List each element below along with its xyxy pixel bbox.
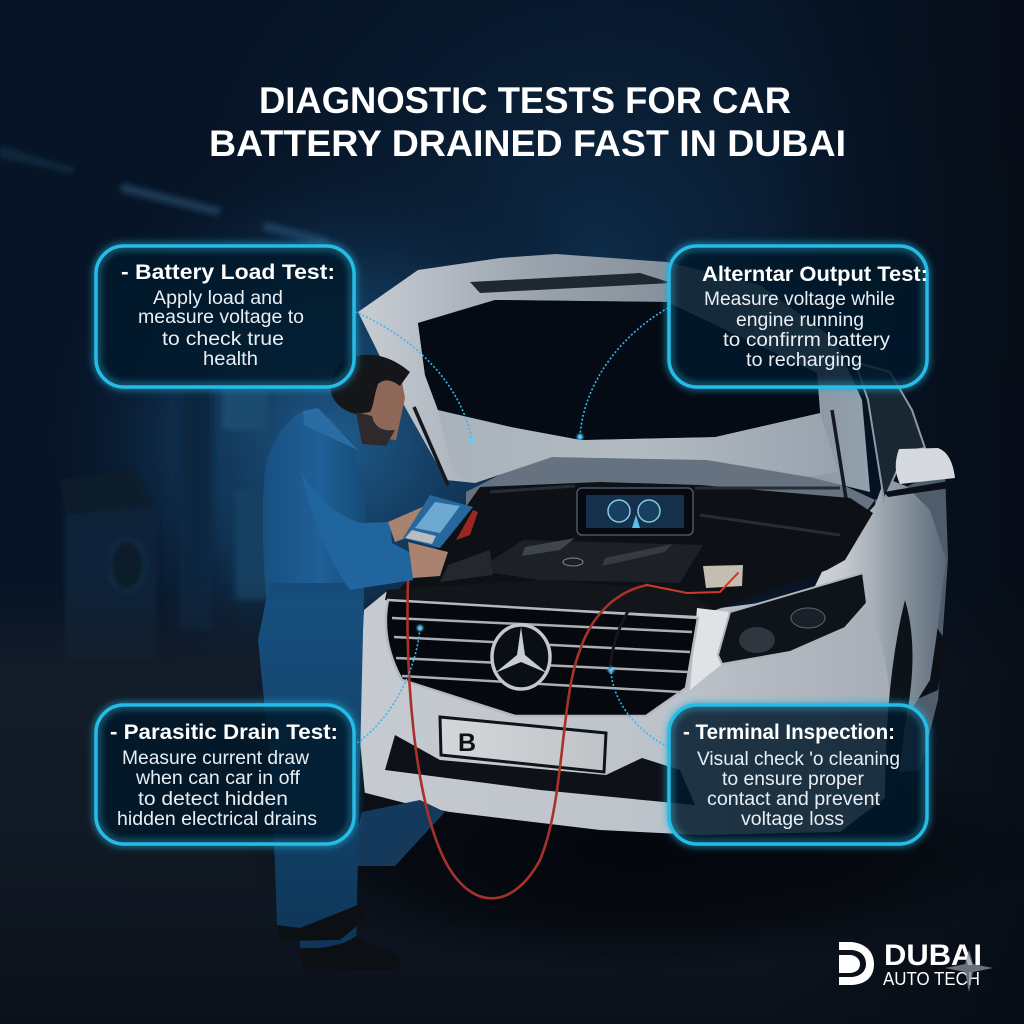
panel: terminal inspection bbox=[669, 705, 927, 844]
body text: Apply load and bbox=[153, 288, 283, 309]
body text: to check true bbox=[162, 329, 284, 350]
engine components bbox=[440, 550, 493, 582]
licence plate bbox=[440, 717, 606, 772]
radiator slam panel bbox=[385, 580, 712, 616]
title: BATTERY DRAINED FAST IN DUBAI bbox=[209, 123, 846, 164]
panel: parasitic drain test bbox=[96, 705, 354, 844]
body text bbox=[117, 748, 317, 830]
coolant reservoir bbox=[703, 565, 743, 588]
licence plate: B bbox=[458, 729, 476, 757]
test cables bbox=[407, 573, 738, 898]
front fender bbox=[760, 478, 946, 830]
star emblem bbox=[492, 625, 550, 689]
body text: when can car in off bbox=[135, 768, 301, 789]
rear door and sill bbox=[875, 470, 948, 775]
body text: hidden electrical drains bbox=[117, 809, 317, 830]
roof pillar and side glass bbox=[855, 362, 925, 500]
body text: engine running bbox=[736, 310, 864, 331]
wing mirror bbox=[884, 448, 955, 497]
title: DIAGNOSTIC TESTS FOR CAR bbox=[259, 80, 791, 121]
front shoe bbox=[298, 936, 400, 970]
front wheel arch bbox=[885, 600, 912, 800]
body text bbox=[138, 288, 304, 370]
cowl highlights bbox=[490, 486, 840, 535]
body text: to confirrm battery bbox=[723, 330, 891, 351]
hood interior bbox=[418, 300, 820, 440]
logo mark bbox=[839, 942, 874, 985]
body text: Measure current draw bbox=[122, 748, 309, 769]
body text: Measure voltage while bbox=[704, 289, 895, 310]
rear tyre bbox=[915, 620, 945, 700]
heading: - Battery Load Test: bbox=[121, 261, 335, 284]
body text: to detect hidden bbox=[138, 789, 288, 810]
heading: - Parasitic Drain Test: bbox=[110, 721, 338, 744]
heading: - Terminal Inspection: bbox=[683, 721, 895, 744]
body text: measure voltage to bbox=[138, 307, 304, 328]
logo wordmark bbox=[883, 939, 982, 989]
title bbox=[209, 80, 846, 164]
logo wordmark: DUBAI bbox=[884, 939, 982, 972]
head bbox=[331, 355, 410, 446]
legs bbox=[258, 590, 364, 948]
body text: contact and prevent bbox=[707, 789, 881, 810]
heading: Alterntar Output Test: bbox=[702, 263, 928, 286]
sparkle bbox=[945, 950, 993, 992]
wheel ramp bbox=[348, 800, 445, 866]
bumper shadow bbox=[362, 792, 440, 820]
hood struts bbox=[414, 407, 851, 530]
lower air intake bbox=[385, 735, 695, 805]
engine bay bbox=[387, 482, 873, 612]
body text bbox=[704, 289, 895, 371]
connector end dots bbox=[417, 434, 614, 673]
car bbox=[358, 254, 955, 835]
open hood bbox=[358, 254, 870, 492]
headlight bbox=[718, 573, 867, 664]
sleeve bbox=[300, 470, 415, 590]
technician bbox=[258, 355, 448, 970]
hands bbox=[388, 505, 448, 578]
waistband bbox=[268, 583, 364, 599]
logo wordmark: AUTO TECH bbox=[883, 969, 980, 989]
logo: Dubai Auto Tech bbox=[839, 939, 993, 992]
bumper body bbox=[358, 590, 895, 835]
connector lines bbox=[354, 308, 668, 747]
front corner bbox=[690, 608, 730, 690]
panel: alternator output test bbox=[669, 246, 928, 387]
body text bbox=[697, 749, 900, 830]
body text: voltage loss bbox=[741, 809, 844, 830]
dashboard display screen bbox=[577, 488, 693, 535]
handheld diagnostic tester bbox=[403, 495, 478, 548]
windscreen bbox=[466, 448, 875, 520]
panel: battery load test bbox=[96, 246, 354, 387]
torso bbox=[263, 411, 366, 595]
body text: to ensure proper bbox=[722, 769, 865, 790]
collar bbox=[303, 408, 358, 450]
body text: health bbox=[203, 349, 258, 370]
engine cover bbox=[488, 538, 703, 583]
rear shoe bbox=[277, 905, 364, 941]
body text: to recharging bbox=[746, 350, 862, 371]
body text: Visual check 'o cleaning bbox=[697, 749, 900, 770]
grille bbox=[386, 600, 698, 716]
